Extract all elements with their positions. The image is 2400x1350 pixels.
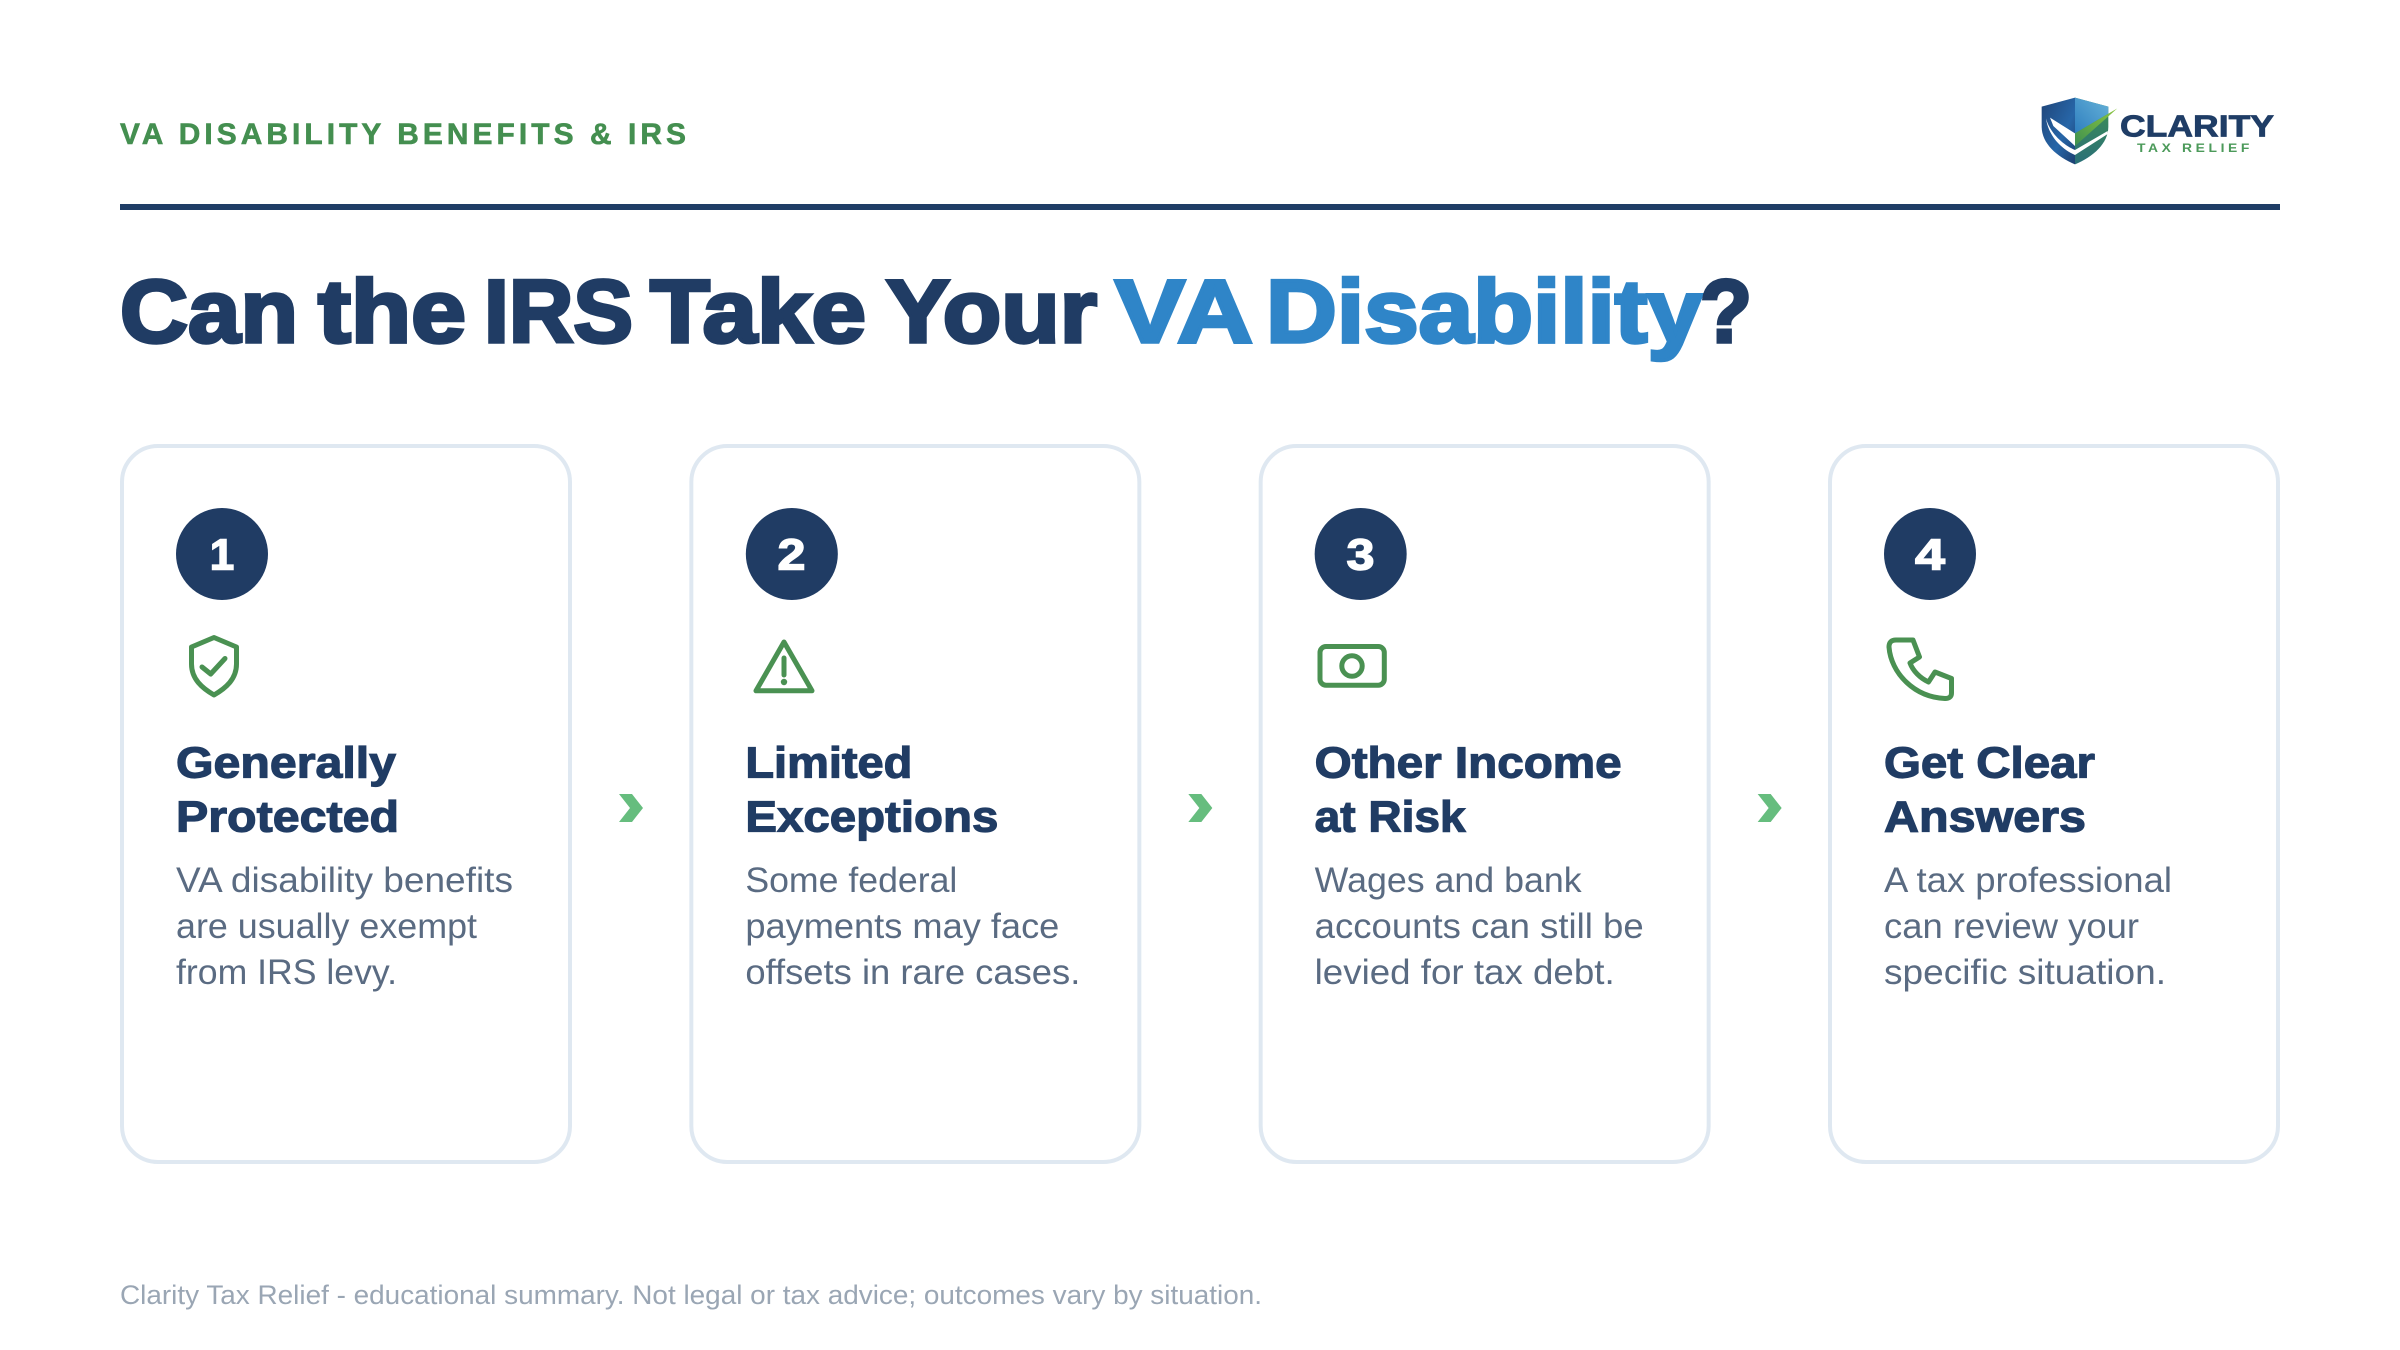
title: IRS <box>484 261 633 361</box>
step number 1 <box>176 508 268 600</box>
step number 2: 2 <box>778 530 806 580</box>
panel: get clear answers <box>1830 446 2278 1162</box>
title: VA <box>1115 261 1250 361</box>
step number 2 <box>746 508 838 600</box>
icon: warning triangle <box>756 642 812 691</box>
panel: generally protected <box>122 446 570 1162</box>
title: Can <box>120 261 298 361</box>
arrow 1 <box>619 794 643 822</box>
icon: phone <box>1889 640 1952 698</box>
logo shield icon <box>2042 98 2117 164</box>
title: Take <box>650 261 866 361</box>
description: from IRS levy. <box>176 953 397 992</box>
description: Wages and bank <box>1315 861 1582 900</box>
heading: Get Clear <box>1884 738 2095 788</box>
description: payments may face <box>745 907 1059 946</box>
arrow 3 <box>1758 794 1782 822</box>
title: Your <box>886 261 1097 361</box>
title: the <box>318 261 466 361</box>
arrow 2 <box>1188 794 1212 822</box>
description: Some federal <box>745 861 957 900</box>
heading: Other Income <box>1315 738 1622 788</box>
heading: at Risk <box>1315 792 1466 842</box>
step number 3: 3 <box>1346 530 1374 580</box>
header rule <box>120 204 2280 210</box>
logo wordmark: CLARITY <box>2120 108 2274 144</box>
step number 3 <box>1315 508 1407 600</box>
panel: limited exceptions <box>691 446 1139 1162</box>
footer disclaimer: Clarity Tax Relief - educational summary. Not legal or tax advice; outcomes vary by situation. <box>120 1280 1262 1310</box>
heading: Exceptions <box>745 792 998 842</box>
title: ? <box>1700 261 1752 361</box>
description: are usually exempt <box>176 907 477 946</box>
description: accounts can still be <box>1315 907 1644 946</box>
eyebrow label: VA DISABILITY BENEFITS & IRS <box>120 118 690 151</box>
description: A tax professional <box>1884 861 2172 900</box>
step number 1: 1 <box>210 530 234 580</box>
heading: Limited <box>745 738 912 788</box>
logo tagline: TAX RELIEF <box>2137 143 2253 155</box>
heading: Protected <box>176 792 399 842</box>
step number 4 <box>1884 508 1976 600</box>
icon: banknote <box>1320 646 1384 685</box>
panel: other income at risk <box>1261 446 1709 1162</box>
logo: Clarity Tax Relief <box>2042 98 2274 164</box>
description: specific situation. <box>1884 953 2166 992</box>
description: VA disability benefits <box>176 861 513 900</box>
description: levied for tax debt. <box>1315 953 1615 992</box>
icon: shield check <box>192 638 236 695</box>
title: Disability <box>1266 261 1703 361</box>
step number 4: 4 <box>1915 530 1946 580</box>
heading: Answers <box>1884 792 2086 842</box>
heading: Generally <box>176 738 397 788</box>
description: can review your <box>1884 907 2139 946</box>
description: offsets in rare cases. <box>745 953 1080 992</box>
